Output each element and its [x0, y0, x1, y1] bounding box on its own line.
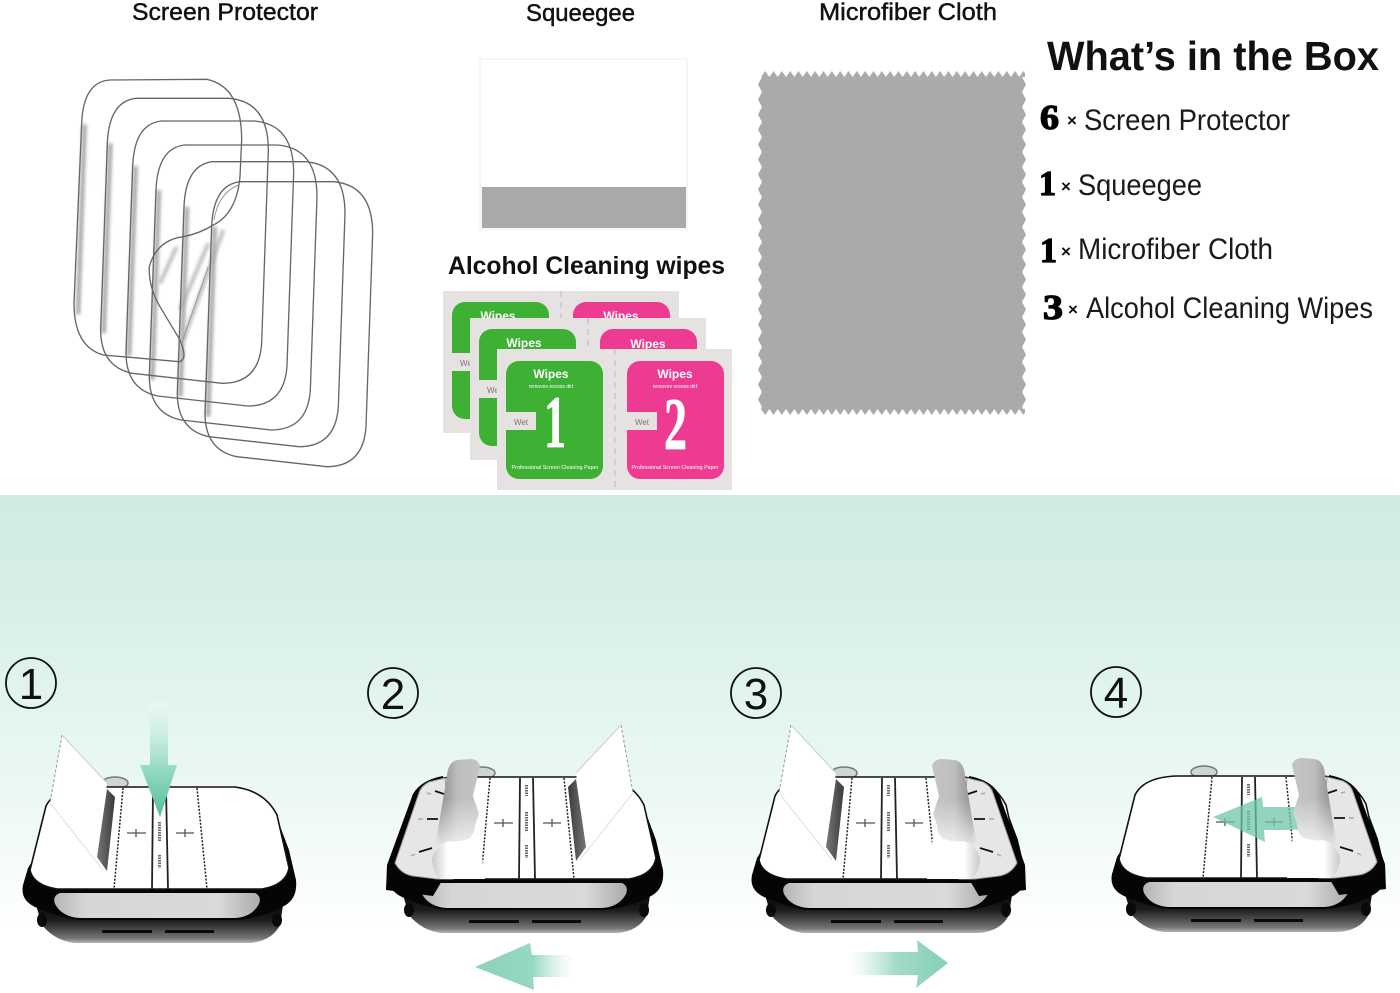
arrow: press down	[140, 703, 177, 817]
list item: 1 microfiber cloth	[1040, 231, 1273, 270]
list item: 6 screen protectors	[1040, 98, 1290, 137]
watch with left flap and right film rolled	[752, 725, 1026, 933]
wipe packet: middle	[470, 318, 706, 460]
list item: 6 screen protectors: 6	[1040, 98, 1059, 137]
step 3	[731, 668, 1026, 988]
wipe packet: middle: Wet	[487, 386, 502, 395]
contents list	[1039, 98, 1373, 327]
list item: 1 squeegee: 1	[1039, 164, 1056, 203]
step number 1	[6, 658, 56, 709]
watch with protector, left flap	[22, 735, 296, 943]
list item: 3 alcohol cleaning wipes	[1043, 288, 1373, 327]
label: Squeegee: Squeegee	[526, 0, 635, 27]
wipe packet: front: Wet	[635, 418, 650, 427]
wipe packet: front: removes excess dirt	[529, 384, 574, 390]
heading: Alcohol Cleaning wipes: Alcohol Cleaning wipes	[448, 252, 725, 280]
wipe packet: back: Wipes	[480, 309, 516, 323]
panel: installation steps background	[0, 495, 1400, 935]
step number 3: 3	[744, 670, 768, 719]
step number 2	[368, 668, 418, 719]
list item: 3 alcohol cleaning wipes: Alcohol Cleaning Wipes	[1086, 292, 1373, 325]
wipe packet: front: 2	[664, 384, 687, 466]
illustration: squeegee card	[479, 58, 688, 230]
watch with left film rolled and right flap	[386, 725, 663, 933]
list item: 1 squeegee: Squeegee	[1078, 169, 1202, 202]
list item: 1 microfiber cloth: ×	[1061, 242, 1071, 261]
wipe packet: back	[443, 291, 679, 433]
list item: 1 squeegee	[1039, 164, 1202, 203]
wipe packet: front: Professional Screen Cleaning Paper	[632, 465, 719, 471]
step number 4	[1091, 667, 1141, 718]
watch with right film rolled	[1112, 766, 1385, 932]
step number 2: 2	[381, 670, 405, 719]
heading: What's in the Box: What’s in the Box	[1047, 33, 1379, 79]
arrow: pull left	[475, 943, 572, 990]
list item: 1 squeegee: ×	[1061, 177, 1071, 196]
wipe packet: back: Wet	[460, 359, 475, 368]
illustration: microfiber cloth	[758, 71, 1026, 415]
wipe packet: back: Wipes	[603, 309, 639, 323]
wipe packet: front: removes excess dirt	[653, 384, 698, 390]
rolled film on watch 4	[1287, 758, 1386, 895]
list item: 3 alcohol cleaning wipes: 3	[1043, 288, 1063, 327]
list item: 1 microfiber cloth: 1	[1040, 231, 1057, 270]
list item: 1 microfiber cloth: Microfiber Cloth	[1078, 233, 1273, 266]
illustration: six stacked screen protector films	[74, 79, 373, 467]
illustration: three wipe packets	[443, 291, 732, 490]
step number 1: 1	[19, 660, 43, 709]
wipe packet: middle: Wipes	[506, 336, 542, 350]
step 2	[368, 668, 663, 990]
wipe packet: middle: Wipes	[630, 337, 666, 351]
list item: 3 alcohol cleaning wipes: ×	[1068, 300, 1078, 319]
step number 3	[731, 668, 781, 719]
arrow: smooth left	[1213, 797, 1300, 842]
list item: 6 screen protectors: Screen Protector	[1084, 104, 1290, 137]
wipe packet: front: 1	[544, 382, 566, 464]
wipe packet: front: Wipes	[657, 367, 693, 381]
wipe packet: front: Wet	[514, 418, 529, 427]
list item: 6 screen protectors: ×	[1067, 111, 1077, 130]
wipe packet: front: Wipes	[533, 367, 569, 381]
step 1	[6, 658, 296, 943]
wipe packet: front: Professional Screen Cleaning Paper	[512, 465, 599, 471]
wipe packet: front	[497, 349, 732, 490]
arrow: pull right	[850, 940, 948, 988]
step 4	[1091, 667, 1386, 932]
step number 4: 4	[1104, 669, 1128, 718]
